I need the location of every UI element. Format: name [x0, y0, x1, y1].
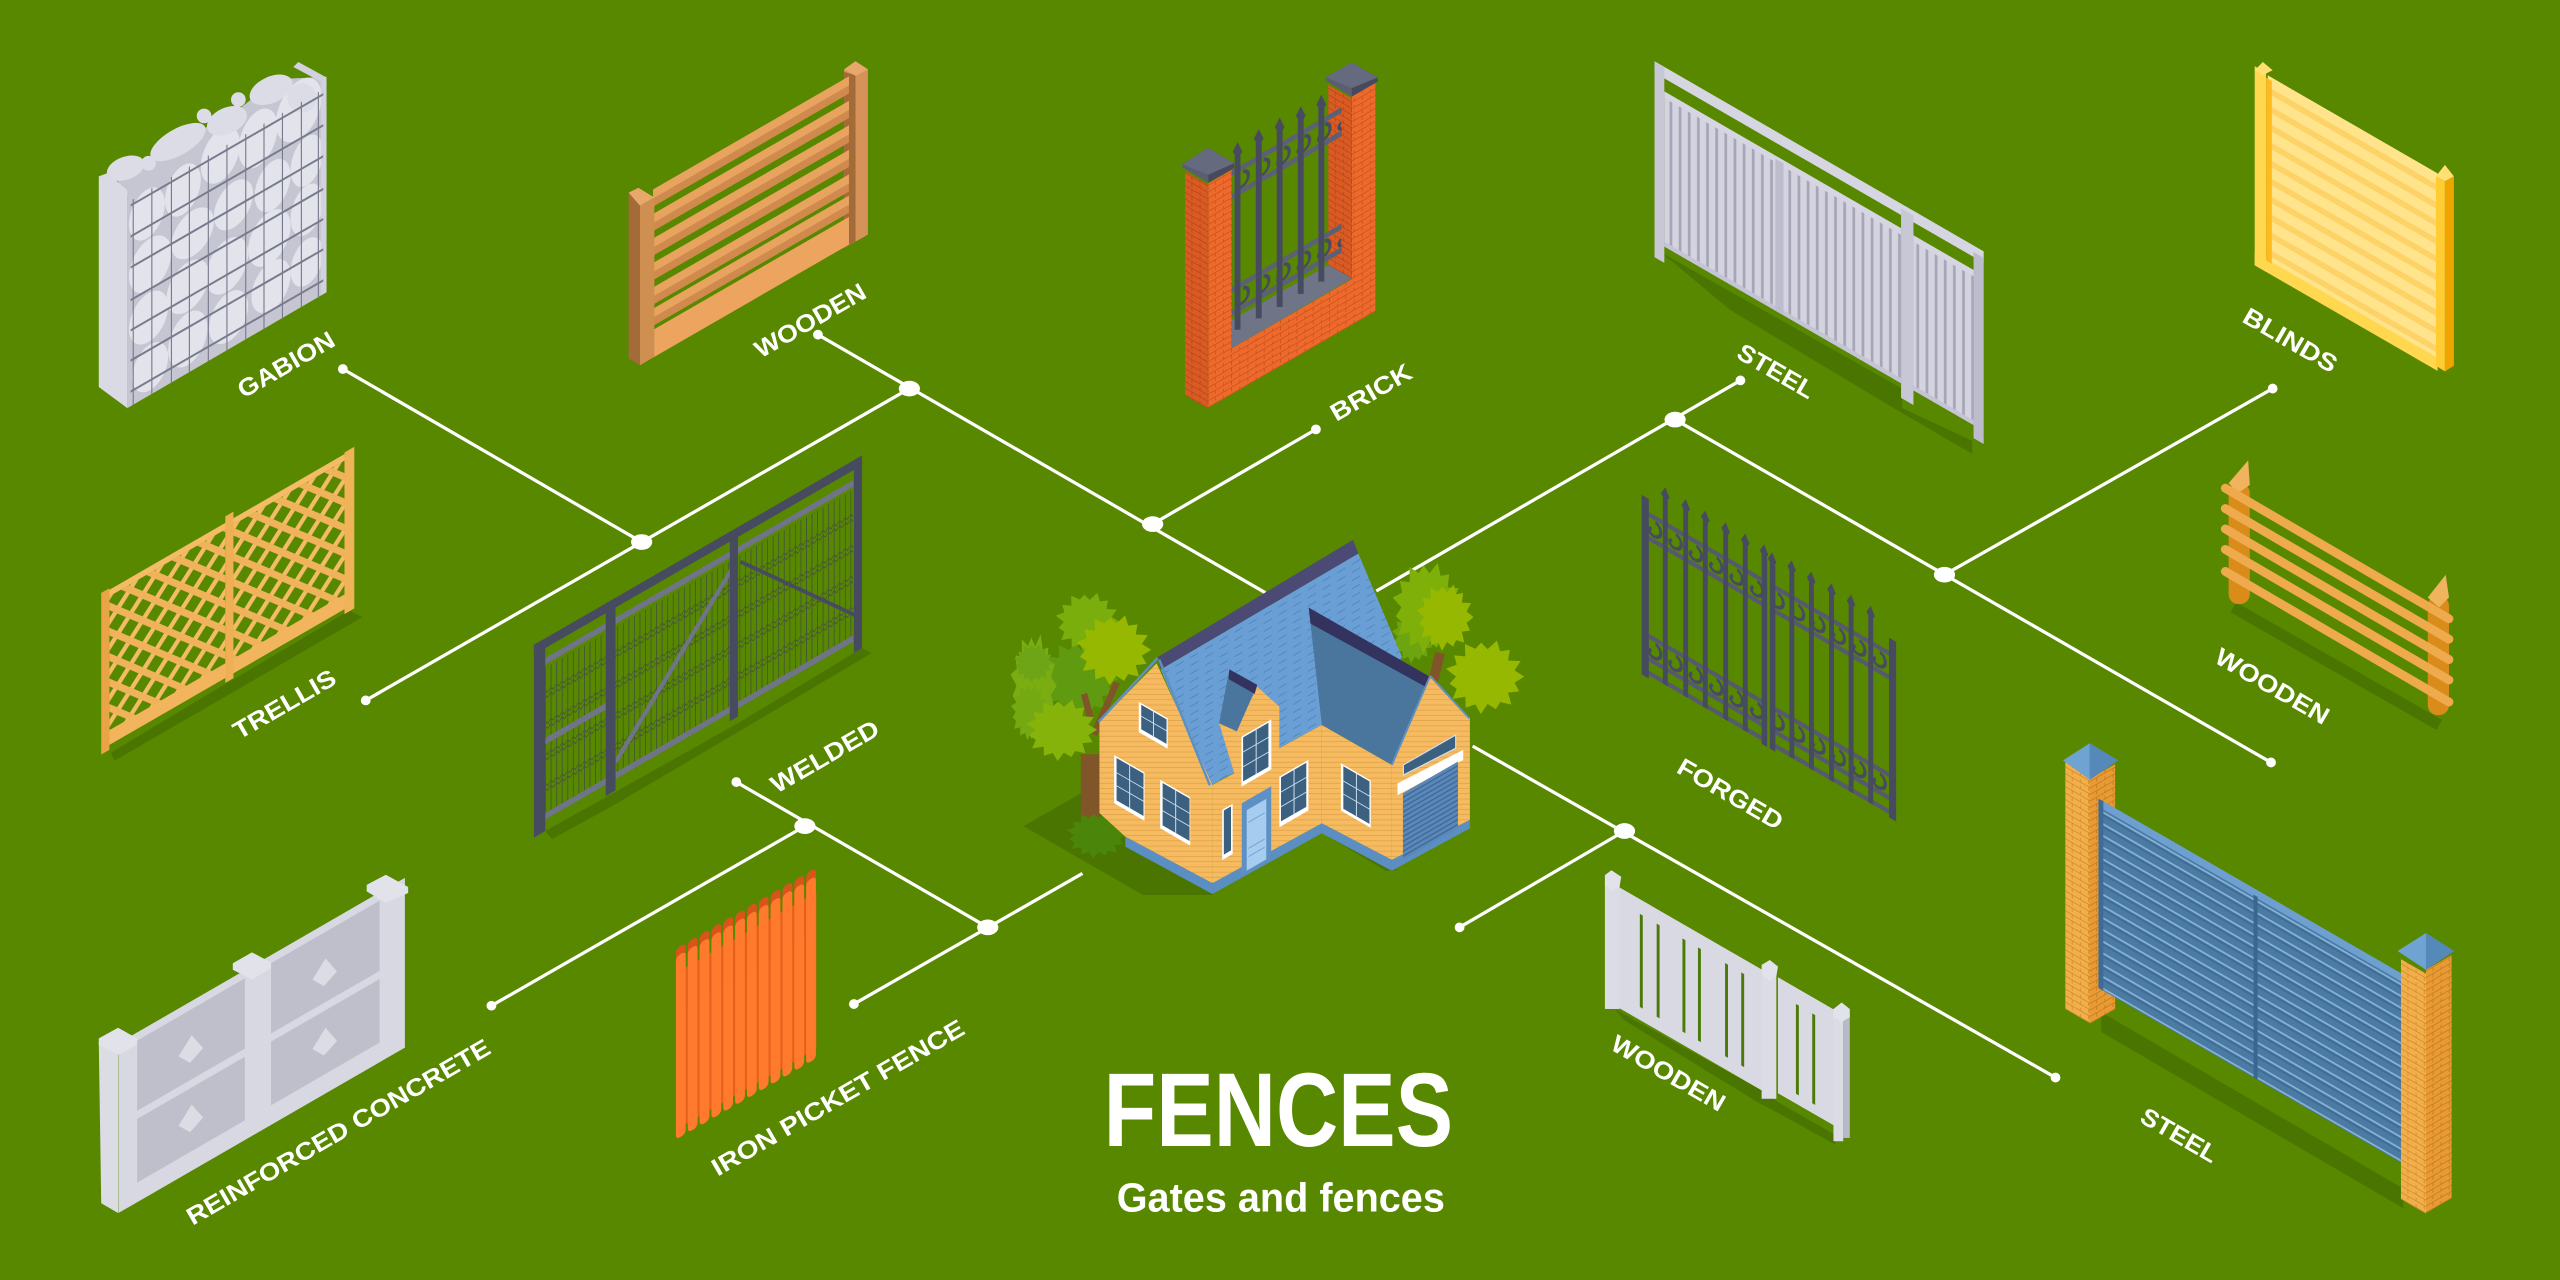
iron bars — [1233, 95, 1326, 330]
label: brick: BRICK — [1326, 359, 1417, 427]
window: right wall — [1341, 763, 1371, 828]
title: FENCES — [1104, 1052, 1453, 1169]
centre wall — [1212, 687, 1322, 883]
left post — [99, 173, 127, 408]
window: narrow by door — [1222, 804, 1233, 860]
blue panel — [2098, 799, 2404, 1164]
label: wooden top left: WOODEN — [750, 279, 871, 364]
right pillar — [2398, 933, 2454, 1214]
window: left gable upper — [1139, 702, 1168, 749]
main panel — [1664, 94, 1901, 383]
right post — [2428, 575, 2449, 715]
side panel — [1913, 238, 1974, 425]
house shadow — [1024, 793, 1212, 895]
left post — [640, 198, 654, 365]
slats — [653, 76, 849, 358]
recessed panels — [137, 901, 380, 1183]
rails — [108, 453, 346, 597]
right pillar — [1328, 85, 1352, 279]
stone sill — [1232, 265, 1352, 348]
shadow — [1615, 1009, 1835, 1144]
right cap — [1326, 62, 1378, 97]
fence: brick — [1182, 62, 1378, 409]
subtitle: Gates and fences — [1117, 1174, 1445, 1220]
spear tips — [1661, 485, 1875, 626]
posts — [1655, 61, 1664, 263]
fence: reinforced concrete — [99, 875, 408, 1213]
fence: welded gate — [534, 455, 872, 839]
window: dormer — [1241, 719, 1271, 787]
label: blinds: BLINDS — [2238, 303, 2342, 379]
scrolls — [1644, 512, 1892, 678]
main roof — [1161, 553, 1402, 786]
mesh — [545, 490, 853, 818]
right post — [844, 61, 868, 248]
backing — [676, 892, 816, 1130]
right tree — [1392, 563, 1524, 714]
post caps — [99, 875, 408, 1055]
shadow — [1662, 253, 1972, 454]
bottom frame — [2255, 252, 2438, 371]
shadow — [111, 611, 362, 761]
pickets — [676, 876, 816, 1140]
foundation — [1125, 820, 1470, 894]
iron rails — [1232, 107, 1342, 200]
garage window — [1403, 735, 1456, 775]
label: trellis: TRELLIS — [229, 665, 341, 745]
wall frame — [118, 878, 405, 1213]
fence: blinds — [2255, 62, 2454, 371]
shaded picket tips — [676, 868, 816, 1014]
brick base and left pillar — [1208, 100, 1352, 408]
door — [1242, 786, 1271, 875]
left post — [2229, 460, 2250, 604]
fence: steel top — [1655, 61, 1984, 454]
diamonds — [179, 958, 337, 1132]
fence: iron picket orange — [676, 868, 816, 1140]
bush — [1066, 813, 1127, 858]
left tree — [1011, 593, 1151, 824]
fence: wooden logs right — [2225, 460, 2449, 725]
fence: forged gate — [1642, 474, 1896, 821]
left cap — [1182, 148, 1234, 183]
left pillar — [2063, 743, 2118, 1024]
lattice — [109, 529, 225, 737]
shadow — [2233, 607, 2439, 725]
slatted panel — [2268, 75, 2438, 363]
bars — [1642, 485, 1896, 821]
left gable wall — [1099, 663, 1212, 883]
right post — [293, 62, 327, 296]
connector lines — [338, 330, 2278, 1082]
label: gabion: GABION — [233, 327, 340, 404]
rails — [1644, 509, 1892, 816]
fence: steel with brick pillars — [2063, 743, 2454, 1214]
shadow — [545, 648, 872, 839]
fence: gabion — [99, 62, 327, 408]
wire mesh — [131, 89, 323, 406]
garage wall — [1392, 677, 1470, 860]
label: reinforced concrete: REINFORCED CONCRETE — [182, 1034, 495, 1231]
label: welded: WELDED — [766, 715, 884, 799]
panels — [1618, 887, 1763, 1091]
left face of first post — [99, 1042, 118, 1213]
diagonal struts — [616, 570, 731, 762]
grey rails — [545, 480, 853, 820]
right wall — [1322, 725, 1392, 860]
dormer roof — [1219, 669, 1257, 731]
label: iron picket fence: IRON PICKET FENCE — [707, 1015, 969, 1182]
cross gable roof — [1309, 608, 1430, 765]
garage door — [1403, 762, 1458, 860]
fence: trellis — [101, 442, 362, 761]
window: left wall one — [1114, 755, 1144, 821]
main ridge — [1158, 540, 1358, 669]
posts — [101, 588, 109, 755]
rails — [2225, 488, 2449, 702]
left post — [2255, 66, 2266, 272]
house illustration — [1011, 540, 1524, 895]
slots — [1640, 914, 1815, 1108]
label: wooden bottom: WOODEN — [1606, 1030, 1730, 1117]
window: left wall two — [1160, 780, 1190, 846]
label: wooden right: WOODEN — [2210, 643, 2334, 731]
shadow — [2101, 1012, 2403, 1208]
fence: wooden slats — [629, 61, 868, 365]
window: centre — [1279, 760, 1308, 827]
top rail and posts — [534, 455, 862, 838]
fence: white wooden — [1605, 870, 1850, 1144]
label: steel bottom: STEEL — [2135, 1103, 2222, 1169]
right post — [2436, 176, 2445, 371]
left tree foliage — [1011, 593, 1151, 761]
garage lintel — [1398, 750, 1463, 795]
label: steel top: STEEL — [1732, 339, 1819, 405]
top rail — [1655, 61, 1984, 263]
posts — [1605, 882, 1843, 1141]
label: forged: FORGED — [1672, 754, 1788, 836]
